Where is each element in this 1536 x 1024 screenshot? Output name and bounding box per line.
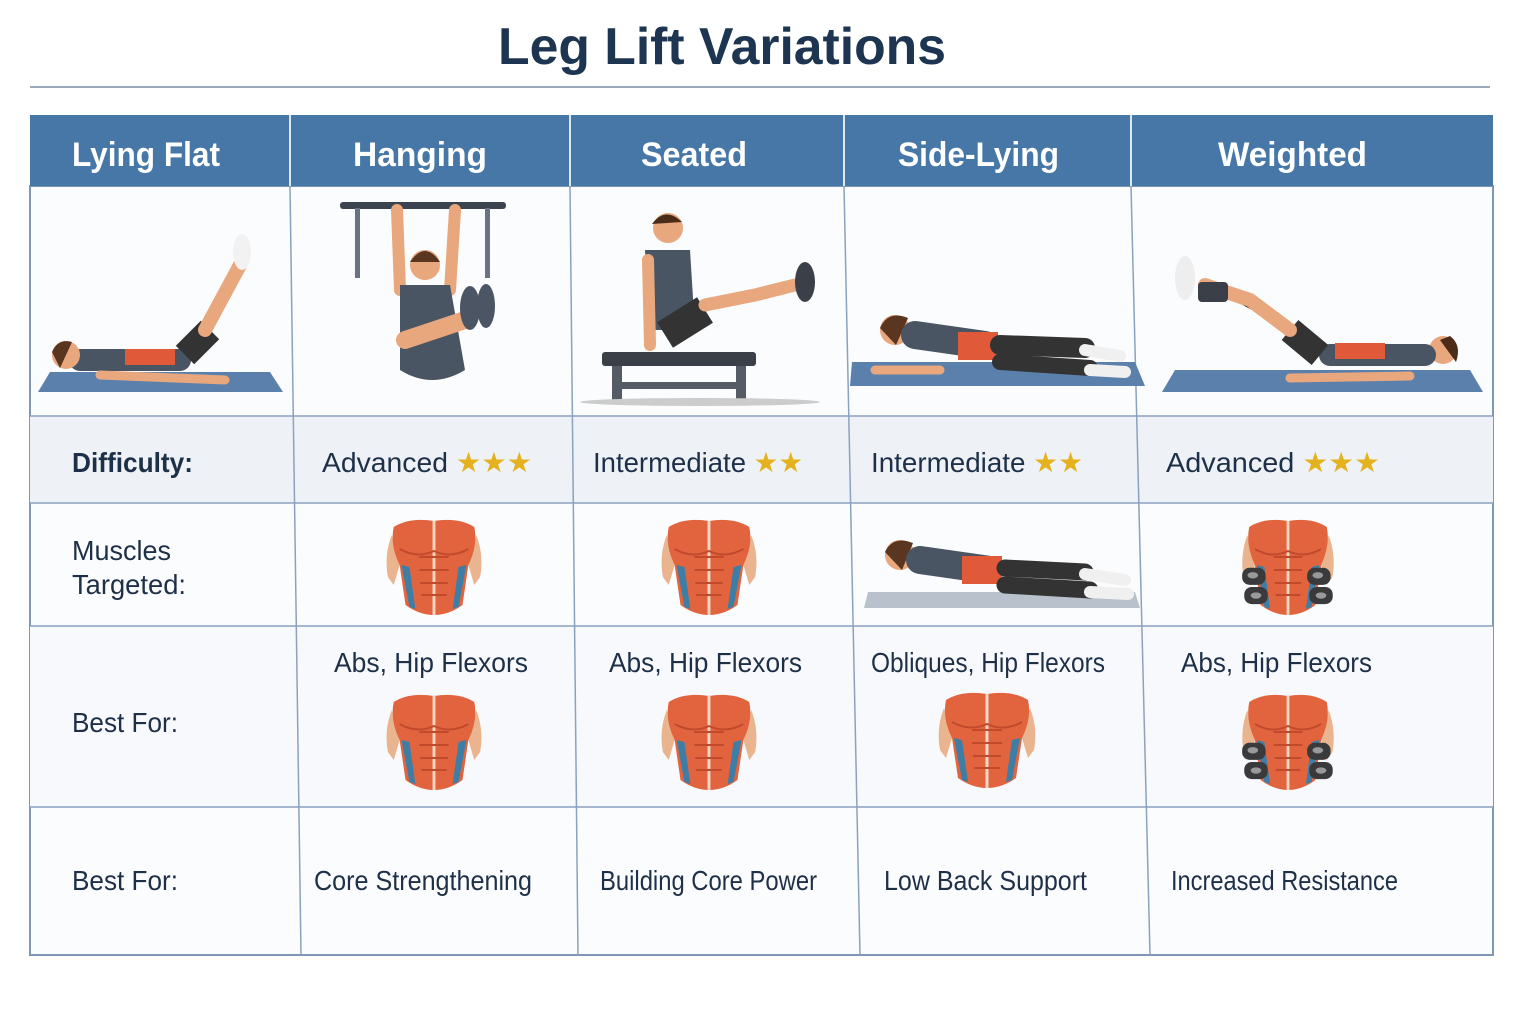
muscles targeted row (72, 520, 1334, 615)
illustration: seated (580, 213, 820, 406)
best for muscles row: Best For: (72, 707, 178, 738)
best for muscles row: Abs, Hip Flexors (609, 647, 802, 678)
best for muscles row: Abs, Hip Flexors (334, 647, 528, 678)
best for goals row: Increased Resistance (1171, 865, 1398, 896)
illustration: side-lying (850, 315, 1145, 386)
best for goals row: Core Strengthening (314, 865, 532, 896)
best for muscles row (72, 647, 1372, 790)
muscles targeted row: Targeted: (72, 569, 186, 600)
illustration: hanging (340, 202, 506, 380)
illustration: lying flat (38, 234, 283, 392)
best for goals row: Low Back Support (884, 865, 1087, 896)
header row: Weighted (1218, 136, 1367, 174)
header row: Lying Flat (72, 136, 220, 174)
difficulty row (72, 447, 1380, 478)
difficulty row: Advanced ★★★ (322, 447, 532, 478)
best for muscles row: Abs, Hip Flexors (1181, 647, 1372, 678)
best for goals row: Building Core Power (600, 865, 817, 896)
header row: Hanging (353, 136, 487, 174)
difficulty row: Difficulty: (72, 447, 193, 478)
header row (30, 115, 1493, 186)
header row: Side-Lying (898, 136, 1059, 174)
title: Leg Lift Variations (498, 18, 946, 76)
best for goals row: Best For: (72, 865, 178, 896)
best for muscles row: Obliques, Hip Flexors (871, 647, 1105, 678)
header row: Seated (641, 136, 747, 174)
illustration: weighted (1162, 256, 1483, 392)
difficulty row: Advanced ★★★ (1166, 447, 1380, 478)
muscles targeted row: Muscles (72, 535, 171, 566)
difficulty row: Intermediate ★★ (593, 447, 803, 478)
table (30, 186, 1493, 955)
best for goals row (72, 865, 1398, 896)
difficulty row: Intermediate ★★ (871, 447, 1083, 478)
